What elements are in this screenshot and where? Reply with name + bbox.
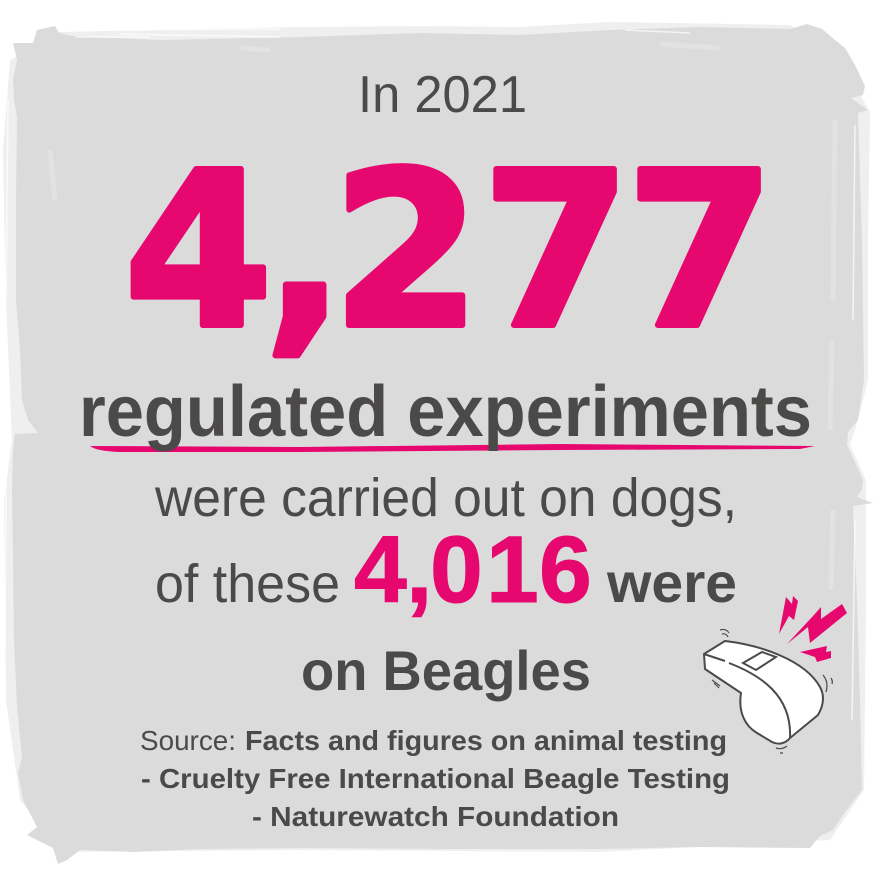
big number: 4,277: 4,277: [124, 127, 775, 376]
source credits: Facts and figures on animal testing: [245, 725, 727, 756]
whistle window: [743, 652, 776, 670]
text line: of these 4,016 were: [155, 517, 737, 623]
whistle body: [704, 641, 823, 744]
lightning bolts: [779, 596, 798, 634]
highlighted number: 4,016: 4,016: [354, 517, 592, 623]
source credits: Source:: [140, 725, 236, 756]
text line: of these 4,016 were: of these: [155, 554, 340, 614]
text line: on Beagles: on Beagles: [301, 639, 591, 702]
source credits: [140, 725, 730, 832]
intro text: In 2021: In 2021: [358, 66, 527, 124]
icon: whistle with lightning bolts: [704, 596, 847, 753]
text line: of these 4,016 were: were: [606, 551, 737, 614]
heading: regulated experiments: regulated experiments: [79, 372, 812, 452]
text line: were carried out on dogs,: were carried out on dogs,: [154, 468, 737, 528]
vibration marks: [712, 629, 832, 753]
source credits: - Cruelty Free International Beagle Testing: [141, 763, 730, 794]
source credits: - Naturewatch Foundation: [252, 801, 619, 832]
pink brush underline: [90, 444, 815, 452]
